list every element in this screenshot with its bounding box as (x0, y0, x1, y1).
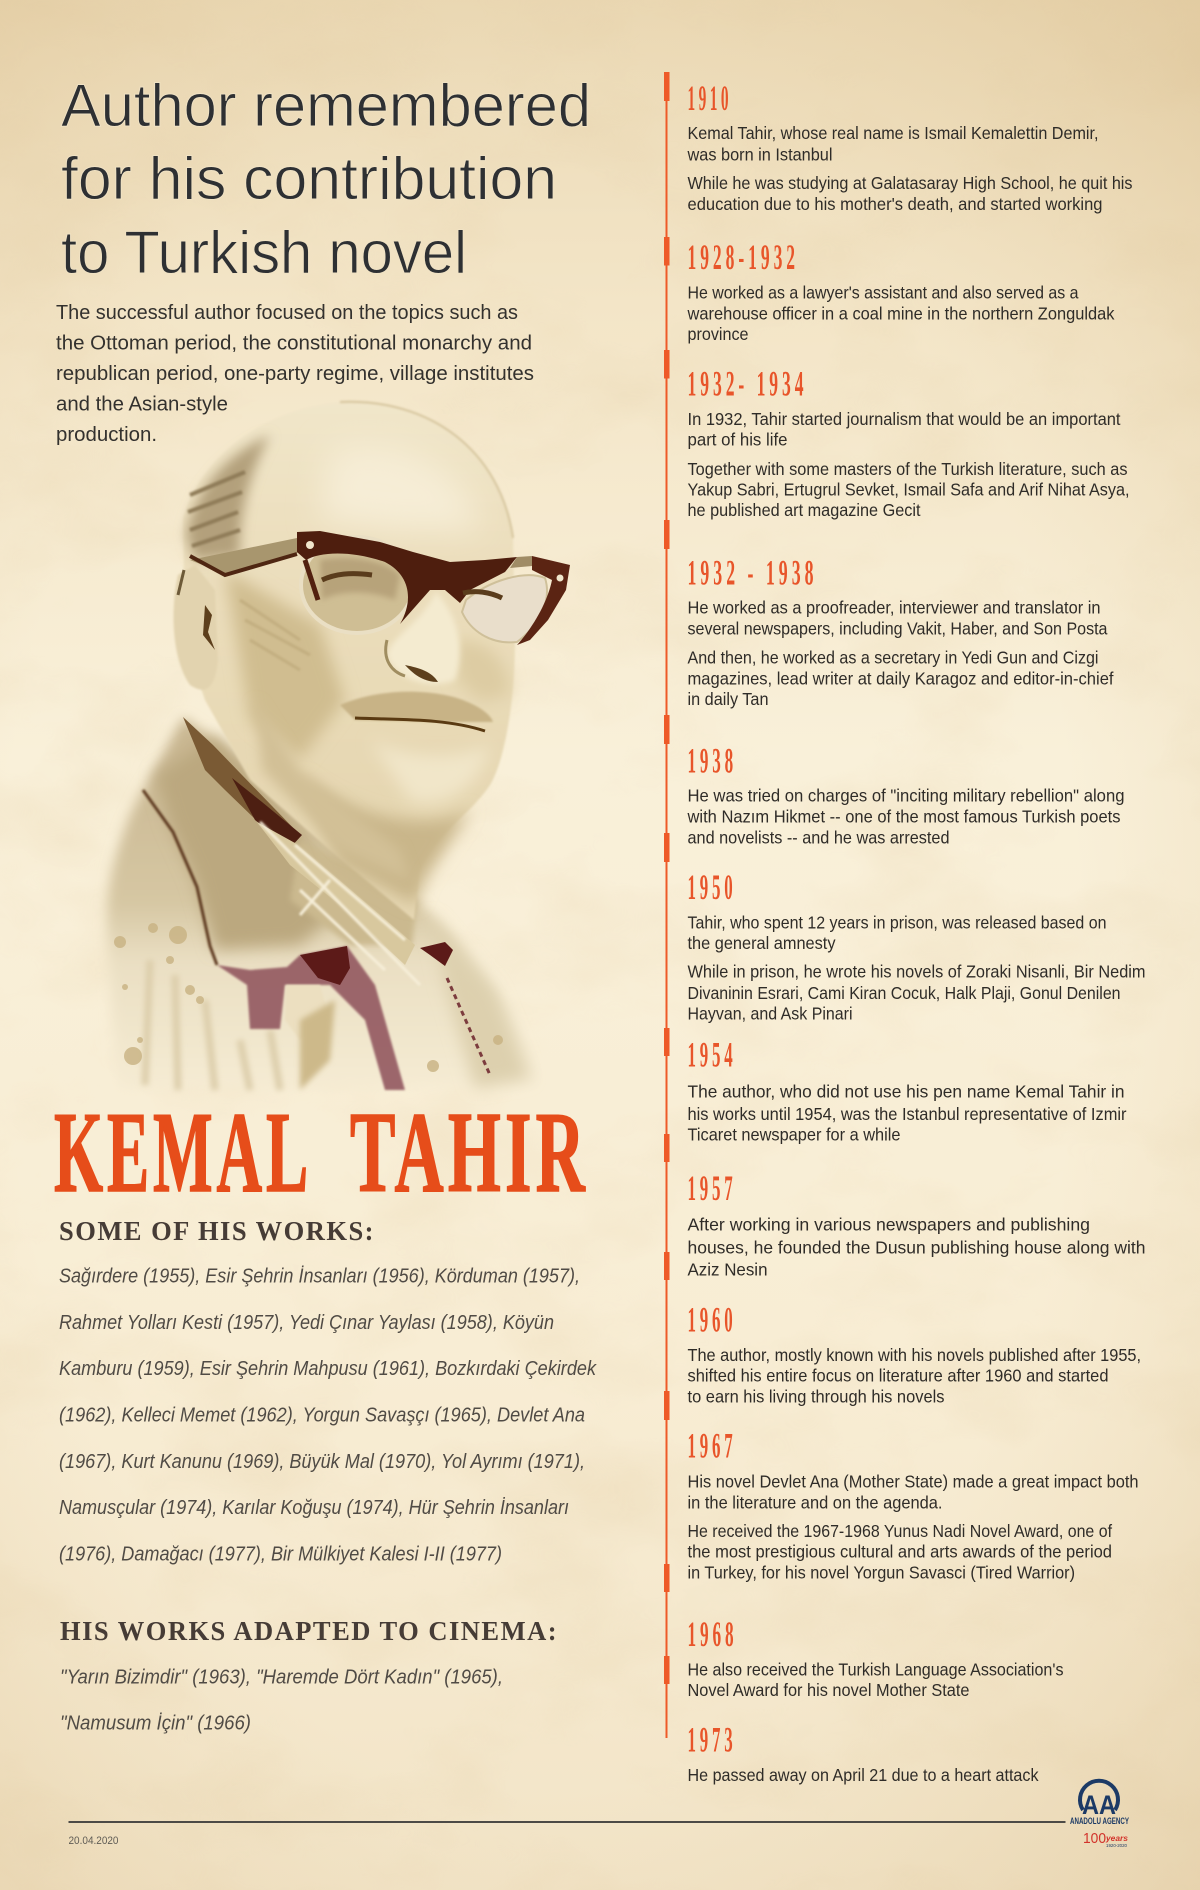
portrait of Kemal Tahir (107, 402, 570, 1090)
intro text: and the Asian-style (56, 392, 228, 416)
timeline entry: 1967: He received the 1967-1968 Yunus Nadi Novel Award, one of (688, 1521, 1112, 1541)
timeline entry: 1957: Aziz Nesin (688, 1260, 768, 1280)
timeline entry: 1954: his works until 1954, was the Istanbul representative of Izmir (688, 1104, 1127, 1124)
title (61, 72, 591, 286)
intro text: The successful author focused on the topics such as (56, 301, 518, 324)
timeline entry: 1932-1934: Together with some masters of the Turkish literature, such as (688, 459, 1128, 479)
timeline entry: 1960: shifted his entire focus on literature after 1960 and started (688, 1366, 1108, 1386)
list of film adaptations (60, 1666, 503, 1734)
list of works: Sağırdere (1955), Esir Şehrin İnsanları (1956), Körduman (1957), (59, 1264, 580, 1288)
timeline axis (664, 72, 670, 1738)
timeline entry: 1932-1934: part of his life (688, 430, 788, 450)
title: to Turkish novel (61, 219, 467, 286)
heading: adapted to cinema: HIS WORKS ADAPTED TO CINEMA: (60, 1616, 558, 1646)
timeline entry: 1968 (688, 1614, 1064, 1700)
timeline entry: 1957: houses, he founded the Dusun publishing house along with (688, 1238, 1146, 1258)
head and neck (183, 402, 515, 920)
timeline entry: 1960: 1960 (688, 1300, 736, 1340)
Anadolu Agency logo: AA (1082, 1790, 1116, 1820)
paint splatter (114, 923, 503, 1072)
lapel line (143, 790, 217, 965)
timeline entry: 1928-1932: 1928-1932 (688, 237, 799, 277)
timeline entry: 1950 (688, 867, 1146, 1024)
ear (174, 565, 218, 690)
tie and shirt stains (217, 942, 490, 1090)
jacket and shoulders (107, 717, 540, 1090)
timeline entry: 1910: 1910 (688, 78, 732, 118)
timeline entry: 1954: The author, who did not use his pen name Kemal Tahir in (688, 1082, 1124, 1102)
list of works: Namusçular (1974), Karılar Koğuşu (1974), Hür Şehrin İnsanları (59, 1496, 569, 1519)
timeline entry: 1957: After working in various newspapers and publishing (688, 1214, 1090, 1234)
timeline entry: 1932-1938: magazines, lead writer at daily Karagoz and editor-in-chief (688, 668, 1114, 688)
timeline entry: 1967: in Turkey, for his novel Yorgun Savasci (Tired Warrior) (688, 1562, 1075, 1582)
intro text: republican period, one-party regime, village institutes (56, 362, 534, 385)
list of works: (1976), Damağacı (1977), Bir Mülkiyet Kalesi I-II (1977) (59, 1542, 502, 1566)
timeline entry: 1967: His novel Devlet Ana (Mother State) made a great impact both (688, 1472, 1138, 1492)
timeline entry: 1967: 1967 (688, 1426, 736, 1466)
timeline entry: 1938 (687, 740, 1124, 848)
timeline entry: 1932-1938: He worked as a proofreader, interviewer and translator in (688, 598, 1100, 618)
list of works (59, 1264, 598, 1566)
list of film adaptations: "Yarın Bizimdir" (1963), "Haremde Dört Kadın" (1965), (60, 1666, 503, 1688)
timeline entry: 1967: the most prestigious cultural and arts awards of the period (688, 1542, 1112, 1562)
intro text: production. (56, 423, 157, 446)
timeline entry: 1954: 1954 (688, 1034, 736, 1074)
timeline entry: 1932-1938: 1932 - 1938 (688, 552, 818, 592)
timeline entry: 1932-1934: Yakup Sabri, Ertugrul Sevket, Ismail Safa and Arif Nihat Asya, (688, 480, 1130, 500)
list of works: Kamburu (1959), Esir Şehrin Mahpusu (1961), Bozkırdaki Çekirdek (59, 1357, 598, 1380)
Anadolu Agency logo: 1920-2020 (1106, 1843, 1127, 1848)
list of film adaptations: "Namusum İçin" (1966) (60, 1712, 251, 1734)
intro text (56, 301, 534, 446)
intro text: the Ottoman period, the constitutional monarchy and (56, 332, 532, 354)
timeline entry: 1932-1934: he published art magazine Gecit (688, 500, 921, 520)
timeline entry: 1960: The author, mostly known with his novels published after 1955, (688, 1345, 1141, 1365)
timeline entry: 1938: with Nazım Hikmet -- one of the most famous Turkish poets (687, 806, 1121, 826)
timeline entry: 1932-1934 (688, 364, 1130, 520)
timeline entry: 1938: He was tried on charges of "inciting military rebellion" along (688, 786, 1124, 806)
Anadolu Agency logo (1070, 1781, 1129, 1848)
name: KEMAL TAHIR: KEMAL (54, 1089, 312, 1216)
timeline entry: 1950: the general amnesty (688, 933, 836, 953)
timeline entry: 1968: Novel Award for his novel Mother State (688, 1680, 970, 1700)
timeline entry: 1950: Hayvan, and Ask Pinari (688, 1004, 852, 1024)
timeline entry: 1910: was born in Istanbul (687, 144, 832, 164)
timeline entry: 1950: 1950 (688, 867, 736, 907)
timeline entry: 1932-1938 (688, 552, 1114, 709)
timeline entry: 1950: Tahir, who spent 12 years in prison, was released based on (688, 912, 1106, 932)
timeline entry: 1957 (688, 1168, 1146, 1280)
title: Author remembered (61, 72, 591, 139)
timeline entry: 1954 (688, 1034, 1127, 1144)
timeline entry: 1960 (688, 1300, 1141, 1406)
timeline entry: 1968: He also received the Turkish Language Association's (688, 1660, 1064, 1680)
timeline entry: 1928-1932: He worked as a lawyer's assistant and also served as a (688, 282, 1079, 302)
timeline entry: 1932-1938: several newspapers, including Vakit, Haber, and Son Posta (688, 618, 1108, 638)
list of works: Rahmet Yolları Kesti (1957), Yedi Çınar Yaylası (1958), Köyün (59, 1311, 554, 1334)
timeline entry: 1932-1934: 1932- 1934 (688, 364, 808, 404)
timeline entry: 1910: While he was studying at Galatasaray High School, he quit his (688, 173, 1133, 193)
timeline entry: 1932-1938: in daily Tan (688, 689, 768, 709)
name: KEMAL TAHIR: TAHIR (350, 1089, 589, 1216)
timeline entry: 1910: education due to his mother's death, and started working (688, 194, 1102, 214)
timeline entry: 1928-1932: province (688, 324, 748, 344)
glasses (190, 531, 570, 645)
timeline entry: 1938: and novelists -- and he was arrested (688, 828, 950, 848)
timeline entry: 1928-1932: warehouse officer in a coal mine in the northern Zonguldak (687, 304, 1115, 324)
timeline entry: 1938: 1938 (688, 740, 737, 780)
timeline entry: 1957: 1957 (688, 1168, 736, 1208)
list of works: (1967), Kurt Kanunu (1969), Büyük Mal (1970), Yol Ayrımı (1971), (59, 1450, 585, 1473)
timeline entry: 1932-1938: And then, he worked as a secretary in Yedi Gun and Cizgi (688, 648, 1098, 668)
list of works: (1962), Kelleci Memet (1962), Yorgun Savaşçı (1965), Devlet Ana (59, 1404, 585, 1426)
timeline entry: 1950: Divaninin Esrari, Cami Kiran Cocuk, Halk Plaji, Gonul Denilen (688, 983, 1120, 1003)
Anadolu Agency logo: years (1105, 1834, 1129, 1843)
timeline entry: 1950: While in prison, he wrote his novels of Zoraki Nisanli, Bir Nedim (688, 962, 1146, 982)
timeline entry: 1932-1934: In 1932, Tahir started journalism that would be an important (688, 409, 1121, 429)
timeline entry: 1973 (688, 1720, 1039, 1785)
Anadolu Agency logo: 100 (1083, 1830, 1106, 1847)
timeline entry: 1960: to earn his living through his novels (688, 1386, 945, 1406)
date: 20.04.2020 (68, 1835, 118, 1847)
heading: some of his works: SOME OF HIS WORKS: (59, 1216, 375, 1246)
title: for his contribution (61, 145, 557, 212)
Anadolu Agency logo: ANADOLU AGENCY (1070, 1816, 1129, 1827)
timeline entry: 1910: Kemal Tahir, whose real name is Ismail Kemalettin Demir, (688, 123, 1098, 143)
timeline entry: 1967 (688, 1426, 1138, 1582)
nose and mouth (340, 592, 493, 731)
timeline entry: 1954: Ticaret newspaper for a while (688, 1124, 900, 1144)
timeline entry: 1910 (687, 78, 1133, 214)
timeline entry: 1973: 1973 (688, 1720, 736, 1760)
timeline entry: 1968: 1968 (688, 1614, 738, 1654)
timeline entry: 1973: He passed away on April 21 due to a heart attack (688, 1765, 1039, 1785)
timeline entry: 1967: in the literature and on the agenda. (688, 1492, 942, 1512)
timeline entry: 1928-1932 (687, 237, 1115, 344)
collar stripe and plaid shirt (183, 717, 420, 985)
